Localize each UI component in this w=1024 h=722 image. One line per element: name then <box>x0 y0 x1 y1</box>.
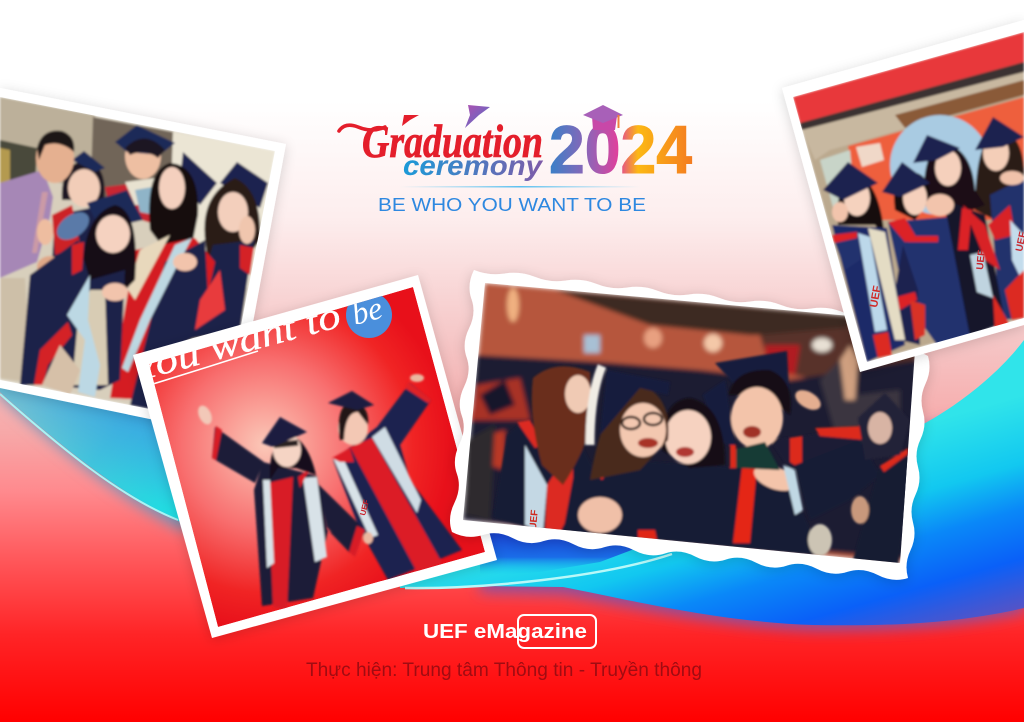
lettering underline <box>153 351 258 384</box>
logo wordmark: Graduation: Graduation <box>362 116 543 168</box>
photo: graduates making heart signs: UEF <box>975 249 988 270</box>
blue circle with be <box>346 296 392 338</box>
guy <box>714 350 790 391</box>
right graduate <box>333 383 462 580</box>
blue circle with be: be <box>347 289 386 332</box>
girl three <box>922 148 984 212</box>
photo card: red backdrop duo <box>129 275 497 638</box>
photo: three graduates hugging in hall <box>463 283 917 565</box>
girl with long hair <box>493 422 595 532</box>
right girl <box>220 162 268 208</box>
stole label: UEF <box>358 499 371 517</box>
stole label: UEF <box>528 509 541 530</box>
fan <box>55 211 90 242</box>
background wave left: teal <box>0 380 260 524</box>
background wave right and bottom: soft edge <box>480 400 1024 630</box>
photo: lecturer and four graduates <box>0 97 275 423</box>
decorative line under logo <box>400 186 640 188</box>
middle girl <box>662 398 725 468</box>
background wave: blue wedge <box>480 528 645 576</box>
flower crown <box>590 366 602 445</box>
tagline: BE WHO YOU WANT TO BE <box>378 194 646 215</box>
girl four <box>975 130 1024 220</box>
credit line: Thực hiện: Trung tâm Thông tin - Truyền thông <box>306 660 702 681</box>
man <box>0 170 53 278</box>
footer logo: UEF eMagazine: UEF eMagazine <box>423 621 587 643</box>
guy at back <box>103 183 152 224</box>
background: light curve bottom <box>405 554 672 588</box>
front girl <box>87 190 143 230</box>
right foreground graduate <box>853 450 912 565</box>
stole labels: UEF <box>868 284 884 309</box>
photo card: four graduates, top right <box>782 20 1024 372</box>
logo wordmark: ceremony: ceremony <box>403 150 543 181</box>
photo: two graduates in front of red wall <box>129 287 485 627</box>
logo: Graduation Ceremony 2024 <box>339 105 692 188</box>
right side gown and arm <box>771 432 862 470</box>
icon: small red plane <box>402 115 419 126</box>
girl with glasses <box>590 385 668 480</box>
hugging gowns <box>560 458 822 556</box>
girl two <box>894 172 930 220</box>
girl at back <box>51 206 98 260</box>
logo year: 2024: 2024 <box>549 112 692 188</box>
girl one <box>836 184 885 230</box>
footer logo: UEF eMagazine <box>423 615 596 648</box>
photo card: group with lecturer, left <box>0 88 286 436</box>
icon: purple plane <box>465 105 490 128</box>
tall girl <box>180 152 217 205</box>
crowd <box>463 355 917 560</box>
photo: graduates making heart signs <box>793 32 1024 362</box>
left graduate <box>254 462 350 606</box>
background wave right and bottom: cyan to blue <box>400 340 1024 625</box>
background wave left: blue corner <box>0 380 260 524</box>
wall lettering: You want to <box>129 294 345 390</box>
background wave left: soft edge <box>0 380 260 532</box>
background: light curve left <box>0 394 178 520</box>
icon: graduation cap <box>583 105 623 130</box>
photo card: wavy hug photo <box>450 270 930 580</box>
